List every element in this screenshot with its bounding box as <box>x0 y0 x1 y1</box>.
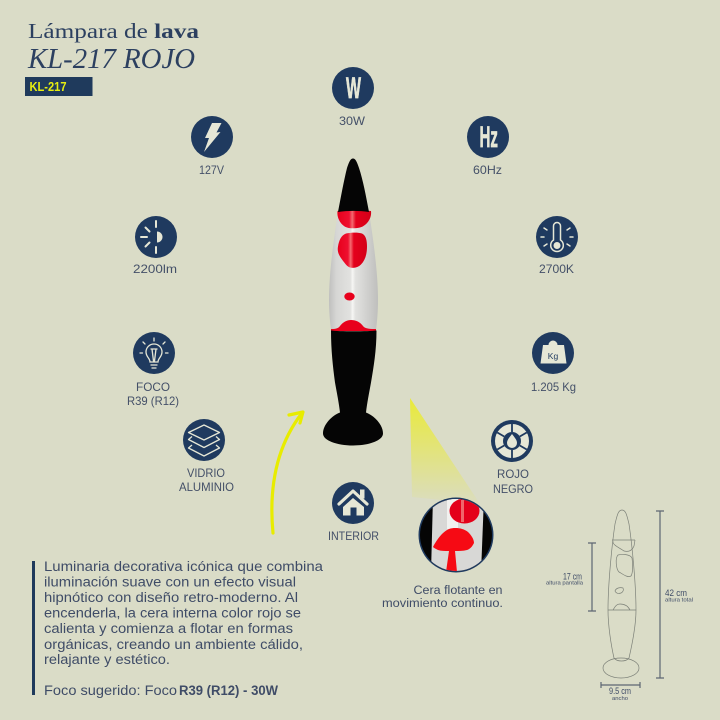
description block: encenderla, la cera interna color rojo se <box>44 606 301 620</box>
yellow arrow <box>272 412 303 533</box>
spec: frequency: 60Hz <box>473 163 502 177</box>
spec: colour temperature: 2700K <box>539 262 574 276</box>
spec: bulb type: FOCO <box>136 380 170 394</box>
detail caption: Cera flotante en <box>414 585 502 597</box>
dimension labels: altura pantalla <box>546 580 584 586</box>
spec: colours <box>491 420 533 496</box>
lamp outline <box>603 510 639 678</box>
dimension labels: 42 cm <box>665 588 687 598</box>
spec: colours: NEGRO <box>493 482 533 496</box>
spec: weight <box>531 332 576 394</box>
lamp glass <box>329 212 378 330</box>
spec: wattage <box>332 67 374 128</box>
dimension labels <box>546 572 693 702</box>
description block: R39 (R12) - 30W <box>179 683 278 698</box>
title: product name: Lámpara de lava <box>28 19 199 43</box>
dimension labels: 17 cm <box>563 572 582 582</box>
dimension labels: ancho <box>612 696 628 702</box>
description block: calienta y comienza a flotar en formas <box>44 621 293 636</box>
spec: indoor use <box>328 482 379 543</box>
spec: indoor use: INTERIOR <box>328 529 379 543</box>
model badge <box>25 77 92 96</box>
lamp cap <box>338 158 369 212</box>
detail caption <box>382 585 503 610</box>
description block: Luminaria decorativa icónica que combina <box>44 559 324 574</box>
description block <box>32 559 324 698</box>
spec: wattage: W <box>346 72 361 105</box>
spec: bulb type: R39 (R12) <box>127 394 179 408</box>
description block: orgánicas, creando un ambiente cálido, <box>44 637 303 652</box>
spec: colour temperature <box>536 216 578 276</box>
dimension lines <box>588 511 664 688</box>
spec: wattage: 30W <box>339 114 366 128</box>
spec: frequency: Hz <box>480 121 498 154</box>
title: product name: KL-217 ROJO <box>27 44 195 75</box>
spec: luminous flux: 2200lm <box>133 262 177 276</box>
spec: colours: ROJO <box>497 467 529 481</box>
detail caption: movimiento continuo. <box>382 598 503 610</box>
lamp lower wax <box>331 320 376 331</box>
spec: bulb type <box>127 332 179 408</box>
spec: weight: Kg <box>548 351 558 361</box>
spec: voltage: 127V <box>199 163 224 177</box>
lamp upper wax <box>337 210 371 228</box>
spec: luminous flux <box>133 216 177 276</box>
lamp floating wax <box>338 233 367 268</box>
description block: iluminación suave con un efecto visual <box>44 574 296 590</box>
spec: voltage <box>191 116 233 177</box>
model badge: KL-217 <box>30 80 67 94</box>
yellow beam <box>410 398 480 504</box>
spec: materials <box>179 419 234 494</box>
detail zoom circle <box>418 497 494 573</box>
description block: relajante y estético. <box>44 652 170 667</box>
lamp base <box>323 330 383 446</box>
lava lamp <box>323 158 383 446</box>
title: product name <box>27 19 199 75</box>
spec: weight: 1.205 Kg <box>531 380 576 394</box>
dimension labels: 9.5 cm <box>609 686 631 696</box>
dimension labels: altura total <box>665 598 693 604</box>
spec: materials: ALUMINIO <box>179 480 234 494</box>
description block: Foco sugerido: Foco <box>44 683 177 698</box>
dimensions diagram <box>546 510 693 702</box>
description block: hipnótico con diseño retro-moderno. Al <box>44 590 298 605</box>
spec: frequency <box>467 116 509 177</box>
spec: materials: VIDRIO <box>187 466 225 480</box>
lamp wax droplet <box>344 292 355 300</box>
